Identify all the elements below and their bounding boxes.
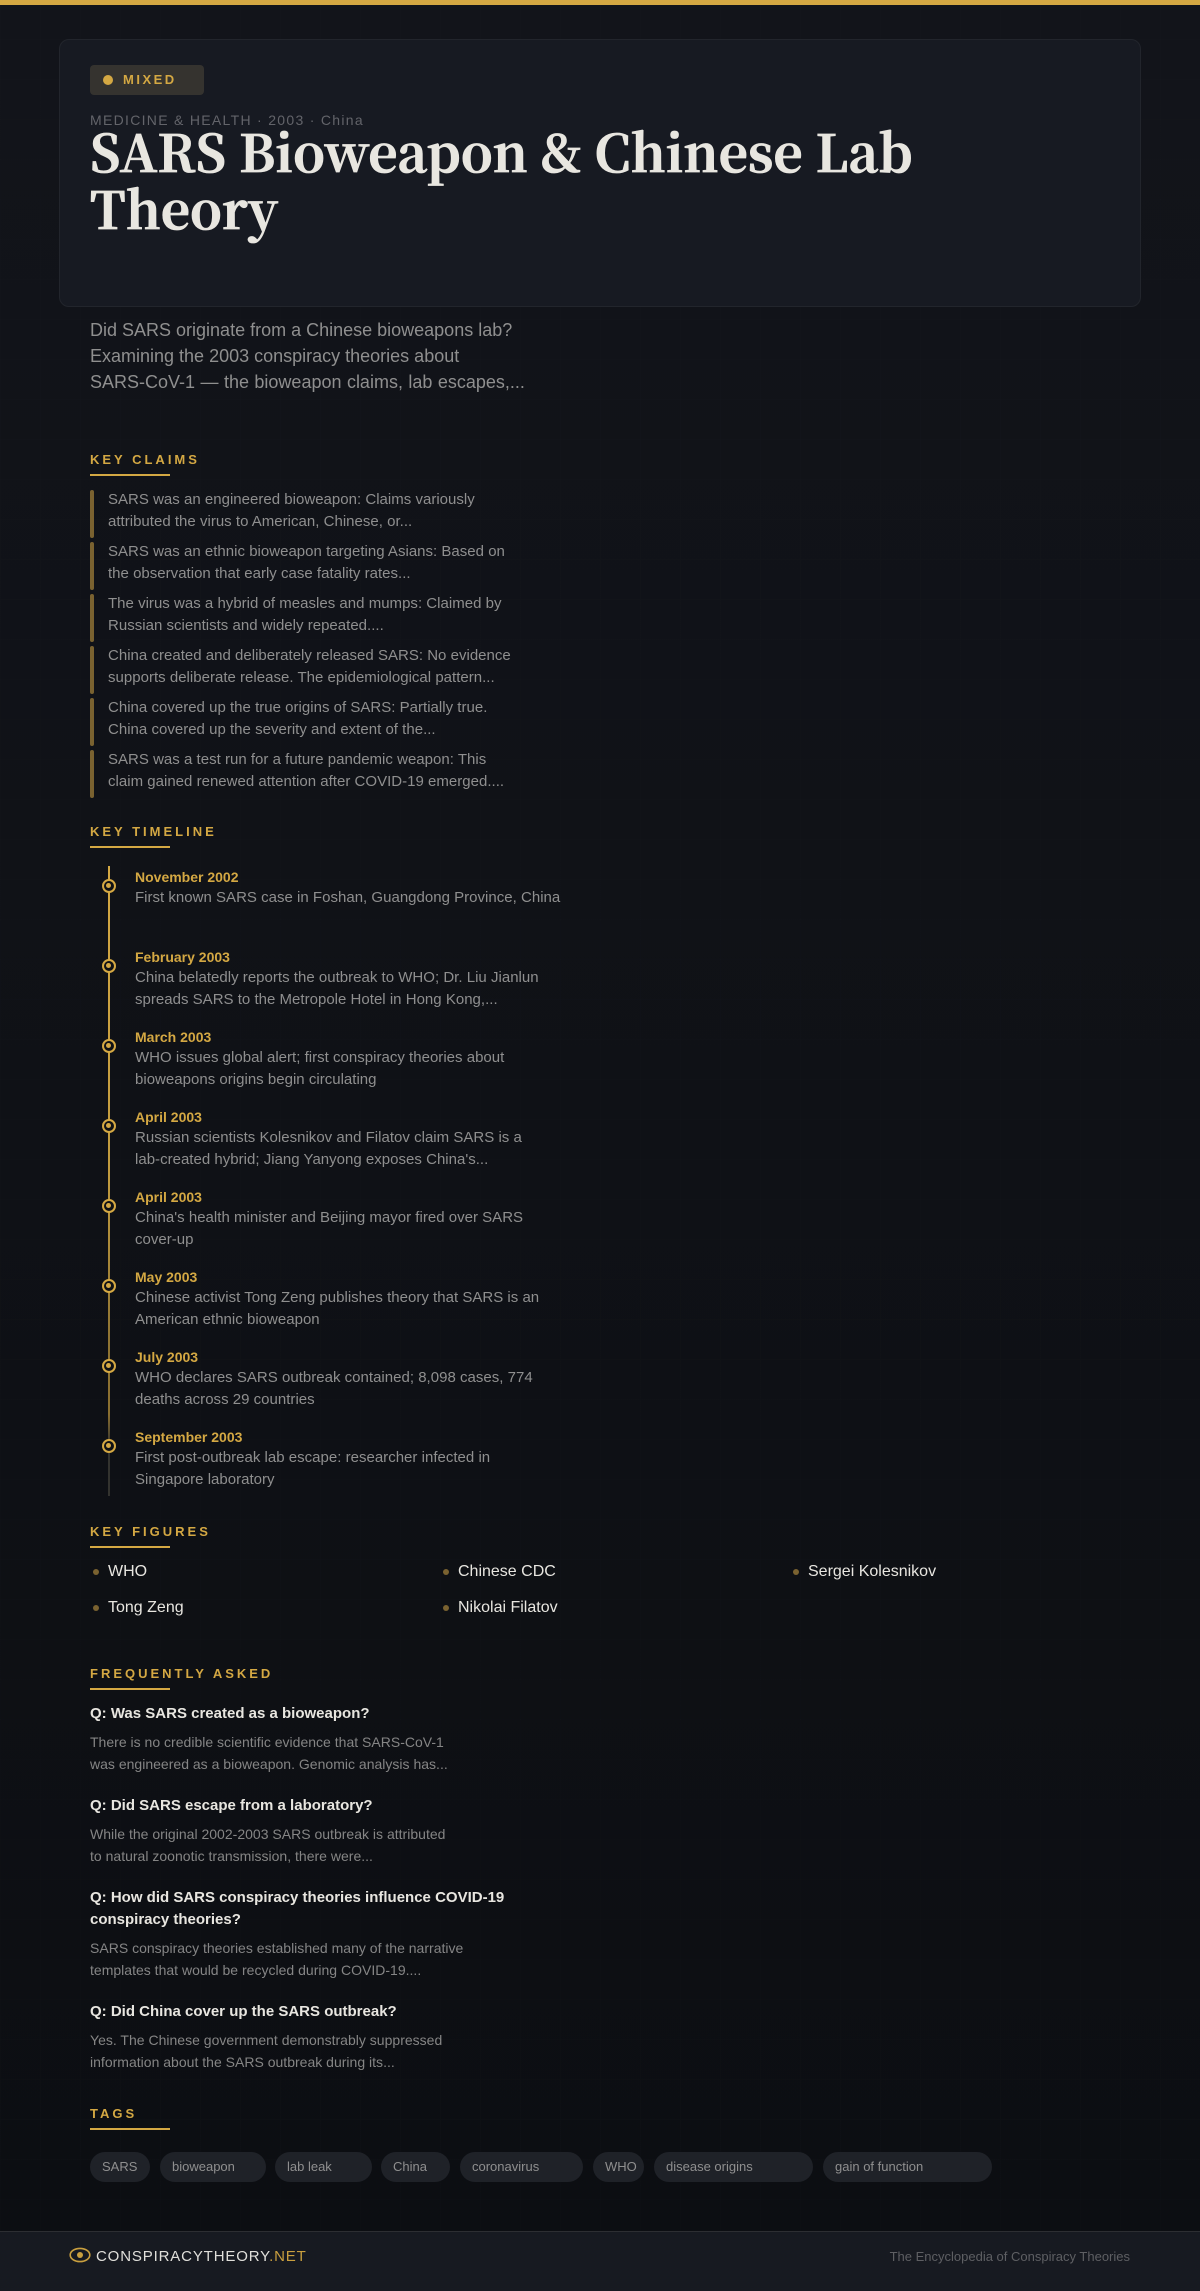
timeline event 8: September 2003	[135, 1429, 242, 1445]
figure: Tong Zeng: Tong Zeng	[108, 1599, 184, 1616]
claim 5: China covered up the severity and extent of the...	[108, 721, 436, 738]
faq answer 1: There is no credible scientific evidence that SARS-CoV-1	[90, 1734, 444, 1750]
tag: China: China	[393, 2159, 427, 2174]
timeline event 1: First known SARS case in Foshan, Guangdong Province, China	[135, 889, 560, 906]
timeline event 4: lab-created hybrid; Jiang Yanyong exposes China's...	[135, 1151, 488, 1168]
claim 2	[90, 542, 505, 590]
claim 3: The virus was a hybrid of measles and mumps: Claimed by	[108, 595, 501, 612]
faq answer 2: While the original 2002-2003 SARS outbreak is attributed	[90, 1826, 445, 1842]
heading: frequently asked: FREQUENTLY ASKED	[90, 1666, 273, 1681]
timeline event 8	[102, 1429, 490, 1488]
badge: mixed verdict	[90, 65, 204, 95]
figure: Sergei Kolesnikov: Sergei Kolesnikov	[808, 1563, 936, 1580]
faq answer 2: to natural zoonotic transmission, there were...	[90, 1848, 373, 1864]
timeline event 7: deaths across 29 countries	[135, 1391, 315, 1408]
tag: SARS	[90, 2152, 150, 2182]
tag: lab leak	[275, 2152, 372, 2182]
footer tagline: The Encyclopedia of Conspiracy Theories	[890, 2249, 1130, 2264]
timeline event 4: April 2003	[135, 1109, 202, 1125]
tag: WHO	[593, 2152, 644, 2182]
faq answer 1	[90, 1734, 448, 1772]
claim 2: SARS was an ethnic bioweapon targeting Asians: Based on	[108, 543, 505, 560]
panel: hero header	[59, 39, 1141, 307]
claim 3: Russian scientists and widely repeated....	[108, 617, 384, 634]
claim 3	[90, 594, 502, 642]
timeline event 3	[102, 1029, 504, 1088]
claim 1: SARS was an engineered bioweapon: Claims variously	[108, 491, 475, 508]
description: Examining the 2003 conspiracy theories about	[90, 346, 459, 366]
description: Did SARS originate from a Chinese bioweapons lab?	[90, 320, 512, 340]
tag: disease origins: disease origins	[666, 2159, 753, 2174]
tag: disease origins	[654, 2152, 813, 2182]
title: SARS Bioweapon & Chinese Lab	[90, 113, 913, 187]
timeline event 3: WHO issues global alert; first conspiracy theories about	[135, 1049, 504, 1066]
timeline spine	[108, 866, 110, 1496]
timeline event 5	[102, 1189, 523, 1248]
timeline event 7: WHO declares SARS outbreak contained; 8,098 cases, 774	[135, 1369, 533, 1386]
faq answer 3: SARS conspiracy theories established many of the narrative	[90, 1940, 463, 1956]
faq answer 2	[90, 1826, 445, 1864]
timeline event 7	[102, 1349, 533, 1408]
timeline event 4: Russian scientists Kolesnikov and Filatov claim SARS is a	[135, 1129, 522, 1146]
timeline event 3: bioweapons origins begin circulating	[135, 1071, 377, 1088]
timeline event 6: May 2003	[135, 1269, 197, 1285]
category line: MEDICINE & HEALTH · 2003 · China	[90, 112, 364, 128]
tag: bioweapon	[160, 2152, 266, 2182]
tag: lab leak: lab leak	[287, 2159, 332, 2174]
timeline event 7: July 2003	[135, 1349, 198, 1365]
timeline event 6: American ethnic bioweapon	[135, 1311, 320, 1328]
timeline event 4	[102, 1109, 522, 1168]
timeline event 5: cover-up	[135, 1231, 193, 1248]
badge: mixed verdict: MIXED	[123, 72, 177, 87]
heading: key timeline: KEY TIMELINE	[90, 824, 217, 839]
title	[90, 113, 913, 244]
heading: key figures: KEY FIGURES	[90, 1524, 211, 1539]
icon: eye logo	[69, 2248, 91, 2262]
description: SARS-CoV-1 — the bioweapon claims, lab escapes,...	[90, 372, 525, 392]
timeline event 5: China's health minister and Beijing mayor fired over SARS	[135, 1209, 523, 1226]
faq question 1: Q: Was SARS created as a bioweapon?	[90, 1705, 370, 1722]
claim 6: claim gained renewed attention after COVID-19 emerged....	[108, 773, 504, 790]
heading: tags: TAGS	[90, 2106, 137, 2121]
claim 5	[90, 698, 487, 746]
timeline event 6	[102, 1269, 539, 1328]
tag: coronavirus	[460, 2152, 583, 2182]
figure: Nikolai Filatov: Nikolai Filatov	[458, 1599, 558, 1616]
footer bar	[0, 2231, 1200, 2291]
timeline event 8: First post-outbreak lab escape: researcher infected in	[135, 1449, 490, 1466]
faq answer 4: Yes. The Chinese government demonstrably suppressed	[90, 2032, 442, 2048]
heading: key claims: KEY CLAIMS	[90, 452, 200, 467]
description	[90, 320, 525, 392]
timeline event 5: April 2003	[135, 1189, 202, 1205]
faq question 3: conspiracy theories?	[90, 1911, 241, 1928]
tag: gain of function: gain of function	[835, 2159, 923, 2174]
faq question 3: Q: How did SARS conspiracy theories influence COVID-19	[90, 1889, 504, 1906]
timeline event 8: Singapore laboratory	[135, 1471, 275, 1488]
claim 5: China covered up the true origins of SARS: Partially true.	[108, 699, 487, 716]
faq answer 1: was engineered as a bioweapon. Genomic analysis has...	[90, 1756, 448, 1772]
timeline event 3: March 2003	[135, 1029, 211, 1045]
timeline event 1	[102, 869, 560, 906]
claim 6: SARS was a test run for a future pandemic weapon: This	[108, 751, 486, 768]
faq question 4: Q: Did China cover up the SARS outbreak?	[90, 2003, 397, 2020]
claim 4	[90, 646, 511, 694]
timeline event 2: February 2003	[135, 949, 230, 965]
faq answer 4: information about the SARS outbreak during its...	[90, 2054, 395, 2070]
footer logo text: CONSPIRACYTHEORY.NET	[96, 2248, 307, 2265]
title: Theory	[90, 170, 278, 244]
tag: WHO: WHO	[605, 2159, 637, 2174]
timeline event 2: China belatedly reports the outbreak to WHO; Dr. Liu Jianlun	[135, 969, 539, 986]
tag: coronavirus: coronavirus	[472, 2159, 539, 2174]
top accent bar	[0, 0, 1200, 5]
claim 1: attributed the virus to American, Chinese, or...	[108, 513, 412, 530]
claim 4: China created and deliberately released SARS: No evidence	[108, 647, 511, 664]
timeline event 2: spreads SARS to the Metropole Hotel in Hong Kong,...	[135, 991, 498, 1008]
tag: SARS: SARS	[102, 2159, 137, 2174]
timeline event 6: Chinese activist Tong Zeng publishes theory that SARS is an	[135, 1289, 539, 1306]
timeline event 2	[102, 949, 539, 1008]
tag: bioweapon: bioweapon	[172, 2159, 235, 2174]
tag: gain of function	[823, 2152, 992, 2182]
claim 2: the observation that early case fatality rates...	[108, 565, 411, 582]
claim 4: supports deliberate release. The epidemiological pattern...	[108, 669, 495, 686]
tag: China	[381, 2152, 450, 2182]
claim 6	[90, 750, 504, 798]
figure: Chinese CDC: Chinese CDC	[458, 1563, 556, 1580]
faq question 3	[90, 1889, 504, 1928]
faq answer 3: templates that would be recycled during COVID-19....	[90, 1962, 421, 1978]
claim 1	[90, 490, 475, 538]
timeline event 1: November 2002	[135, 869, 239, 885]
faq answer 3	[90, 1940, 463, 1978]
figure: WHO: WHO	[108, 1563, 147, 1580]
faq answer 4	[90, 2032, 442, 2070]
faq question 2: Q: Did SARS escape from a laboratory?	[90, 1797, 373, 1814]
